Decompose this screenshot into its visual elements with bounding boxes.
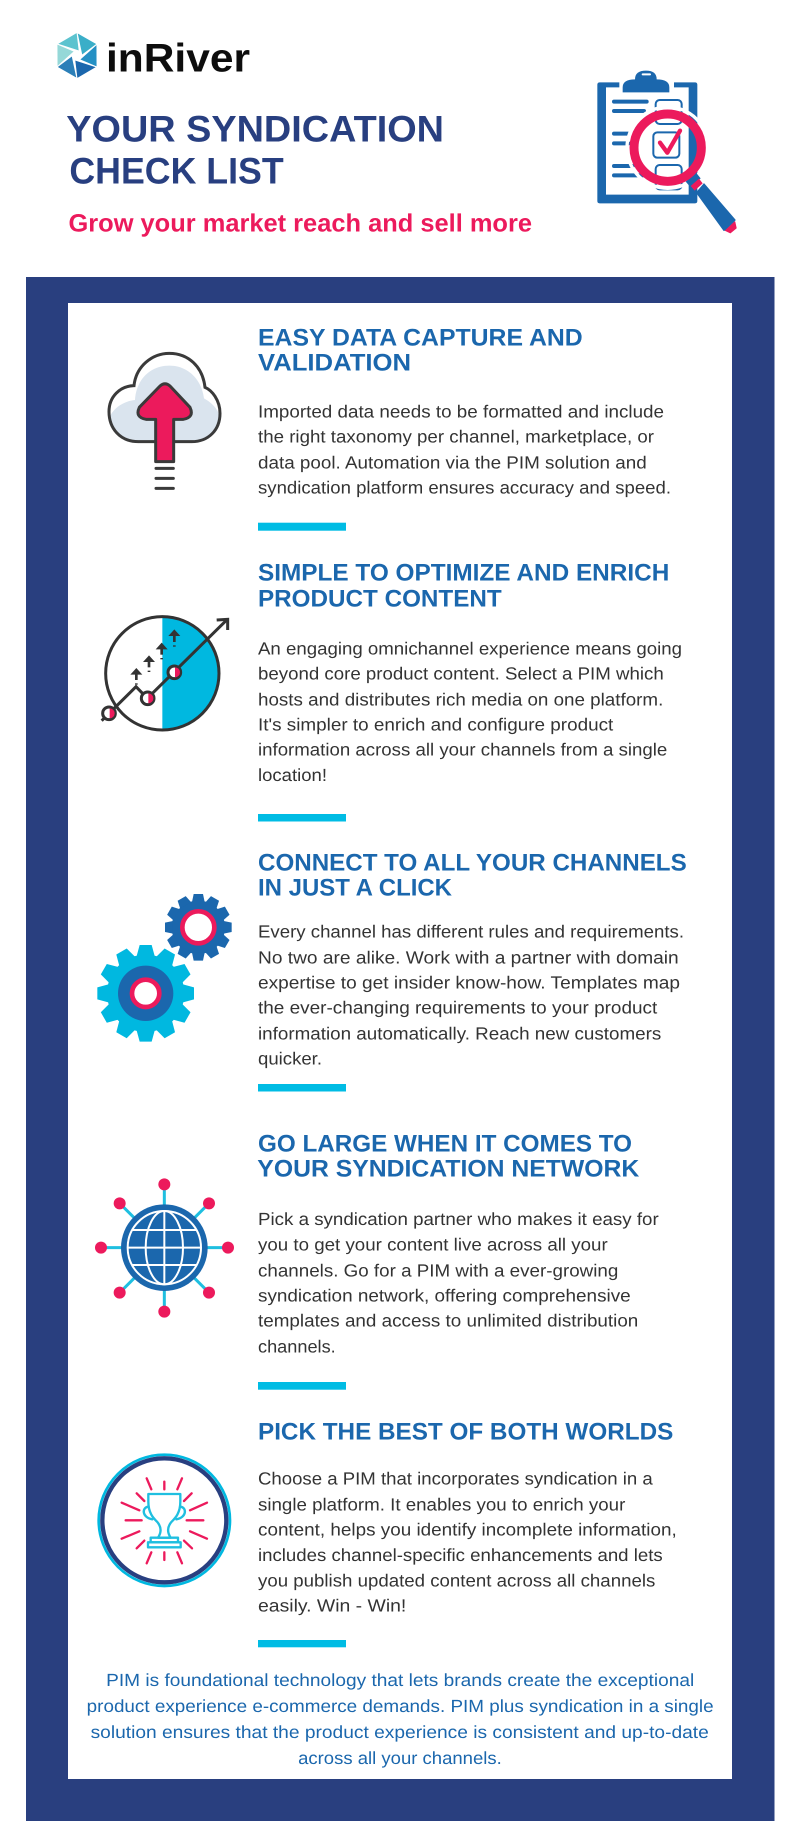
heading: SIMPLE TO OPTIMIZE AND ENRICH: [258, 560, 669, 587]
icon: logo shutter: [47, 27, 107, 84]
heading: PRODUCT CONTENT: [258, 586, 502, 613]
title: YOUR SYNDICATION: [66, 109, 444, 150]
body text: [258, 638, 682, 785]
divider bar: [258, 1084, 346, 1092]
heading: VALIDATION: [258, 350, 411, 377]
body text: It's simpler to enrich and configure product: [258, 714, 613, 734]
body text: channels.: [258, 1336, 336, 1356]
body text: the ever-changing requirements to your product: [258, 997, 657, 1017]
closing statement: across all your channels.: [298, 1748, 502, 1768]
panel: white content: [68, 303, 732, 1779]
section: simple to optimize: [102, 560, 682, 822]
heading: [258, 325, 583, 377]
heading: GO LARGE WHEN IT COMES TO: [258, 1131, 632, 1158]
body text: easily. Win - Win!: [258, 1595, 406, 1615]
body text: Pick a syndication partner who makes it easy for: [258, 1209, 659, 1229]
body text: Every channel has different rules and requirements.: [258, 921, 684, 941]
body text: [258, 921, 684, 1068]
section: connect to all channels: [97, 850, 687, 1092]
heading: [257, 1131, 640, 1183]
divider bar: [258, 1382, 346, 1390]
body text: hosts and distributes rich media on one platform.: [258, 689, 663, 709]
panel: navy frame: [26, 277, 774, 1821]
body text: expertise to get insider know-how. Templates map: [258, 972, 680, 992]
closing statement: solution ensures that the product experience is consistent and up-to-date: [91, 1722, 709, 1742]
body text: [258, 401, 671, 497]
body text: syndication platform ensures accuracy and speed.: [258, 477, 671, 497]
body text: single platform. It enables you to enrich your: [258, 1494, 625, 1514]
divider bar: [258, 1640, 346, 1647]
closing statement: product experience e-commerce demands. PIM plus syndication in a single: [87, 1696, 714, 1716]
closing statement: [87, 1670, 714, 1768]
divider bar: [258, 814, 346, 822]
icon: growth chart: [102, 617, 228, 730]
heading: PICK THE BEST OF BOTH WORLDS: [258, 1419, 673, 1446]
body text: Imported data needs to be formatted and include: [258, 401, 664, 421]
icon: cloud upload: [109, 353, 220, 488]
body text: the right taxonomy per channel, marketplace, or: [258, 426, 654, 446]
body text: content, helps you identify incomplete information,: [258, 1519, 677, 1539]
icon: clipboard with magnifying glass: [597, 71, 736, 233]
logo: inRiver: [47, 27, 250, 84]
heading: [258, 560, 669, 613]
body text: information automatically. Reach new customers: [258, 1023, 662, 1043]
section: easy data capture: [109, 325, 671, 531]
body text: quicker.: [258, 1048, 322, 1068]
body text: [258, 1209, 659, 1356]
body text: you to get your content live across all your: [258, 1235, 608, 1255]
closing statement: PIM is foundational technology that lets brands create the exceptional: [106, 1670, 694, 1690]
logo wordmark: inRiver: [106, 37, 250, 81]
body text: beyond core product content. Select a PIM which: [258, 663, 664, 683]
body text: information across all your channels from a single: [258, 739, 667, 759]
icon: network globe: [95, 1178, 234, 1318]
body text: [258, 1468, 677, 1615]
icon: trophy badge: [99, 1455, 230, 1586]
body text: An engaging omnichannel experience means going: [258, 638, 682, 658]
section: best of both worlds: [99, 1419, 677, 1647]
heading: EASY DATA CAPTURE AND: [258, 325, 583, 352]
body text: location!: [258, 765, 327, 785]
title: CHECK LIST: [69, 151, 284, 192]
body text: templates and access to unlimited distribution: [258, 1310, 638, 1330]
heading: IN JUST A CLICK: [258, 875, 453, 902]
heading: YOUR SYNDICATION NETWORK: [257, 1156, 640, 1183]
body text: No two are alike. Work with a partner with domain: [258, 947, 679, 967]
subtitle: Grow your market reach and sell more: [68, 210, 532, 238]
body text: channels. Go for a PIM with a ever-growing: [258, 1260, 618, 1280]
body text: includes channel-specific enhancements and lets: [258, 1545, 663, 1565]
body text: you publish updated content across all channels: [258, 1570, 656, 1590]
section: go large: [95, 1131, 659, 1390]
body text: syndication network, offering comprehensive: [258, 1285, 631, 1305]
heading: CONNECT TO ALL YOUR CHANNELS: [258, 850, 687, 877]
icon: gears: [97, 894, 232, 1042]
heading: [258, 850, 687, 902]
divider bar: [258, 523, 346, 531]
title: [66, 109, 444, 192]
body text: Choose a PIM that incorporates syndication in a: [258, 1468, 653, 1488]
body text: data pool. Automation via the PIM solution and: [258, 452, 647, 472]
